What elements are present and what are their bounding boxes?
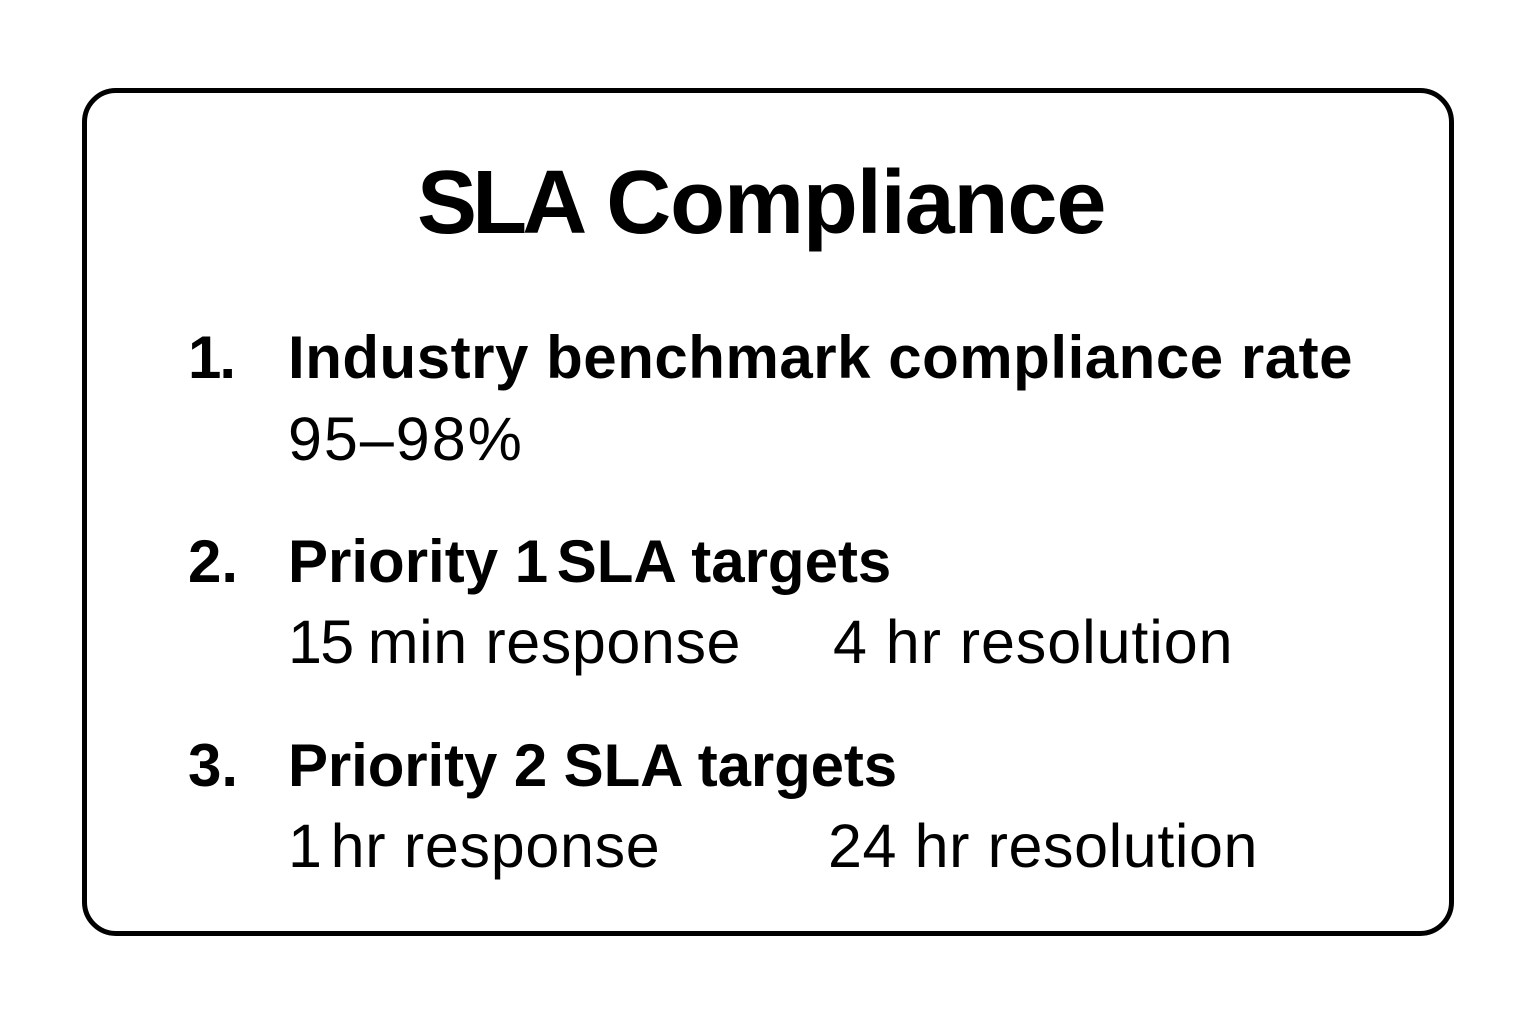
number 1: 1. (188, 324, 234, 391)
title: SLA Compliance (417, 153, 1105, 253)
panel: SLA compliance card (82, 88, 1454, 936)
value: compliance range: 95–98% (288, 405, 524, 473)
value: priority 2 response: 1 hr response (288, 812, 660, 880)
list item 2 (188, 528, 1234, 676)
value: priority 1 response: 15 min response (288, 608, 741, 676)
value: priority 1 resolution: 4 hr resolution (833, 608, 1234, 676)
value: priority 2 resolution: 24 hr resolution (828, 812, 1258, 880)
heading: priority 2 targets: Priority 2 SLA targets (288, 732, 897, 799)
number 2: 2. (188, 528, 238, 595)
number 3: 3. (188, 732, 238, 799)
heading: priority 1 targets: Priority 1 SLA targets (288, 528, 891, 595)
list item 1 (188, 324, 1353, 473)
list item 3 (188, 732, 1258, 880)
heading: industry benchmark: Industry benchmark compliance rate (288, 324, 1353, 391)
